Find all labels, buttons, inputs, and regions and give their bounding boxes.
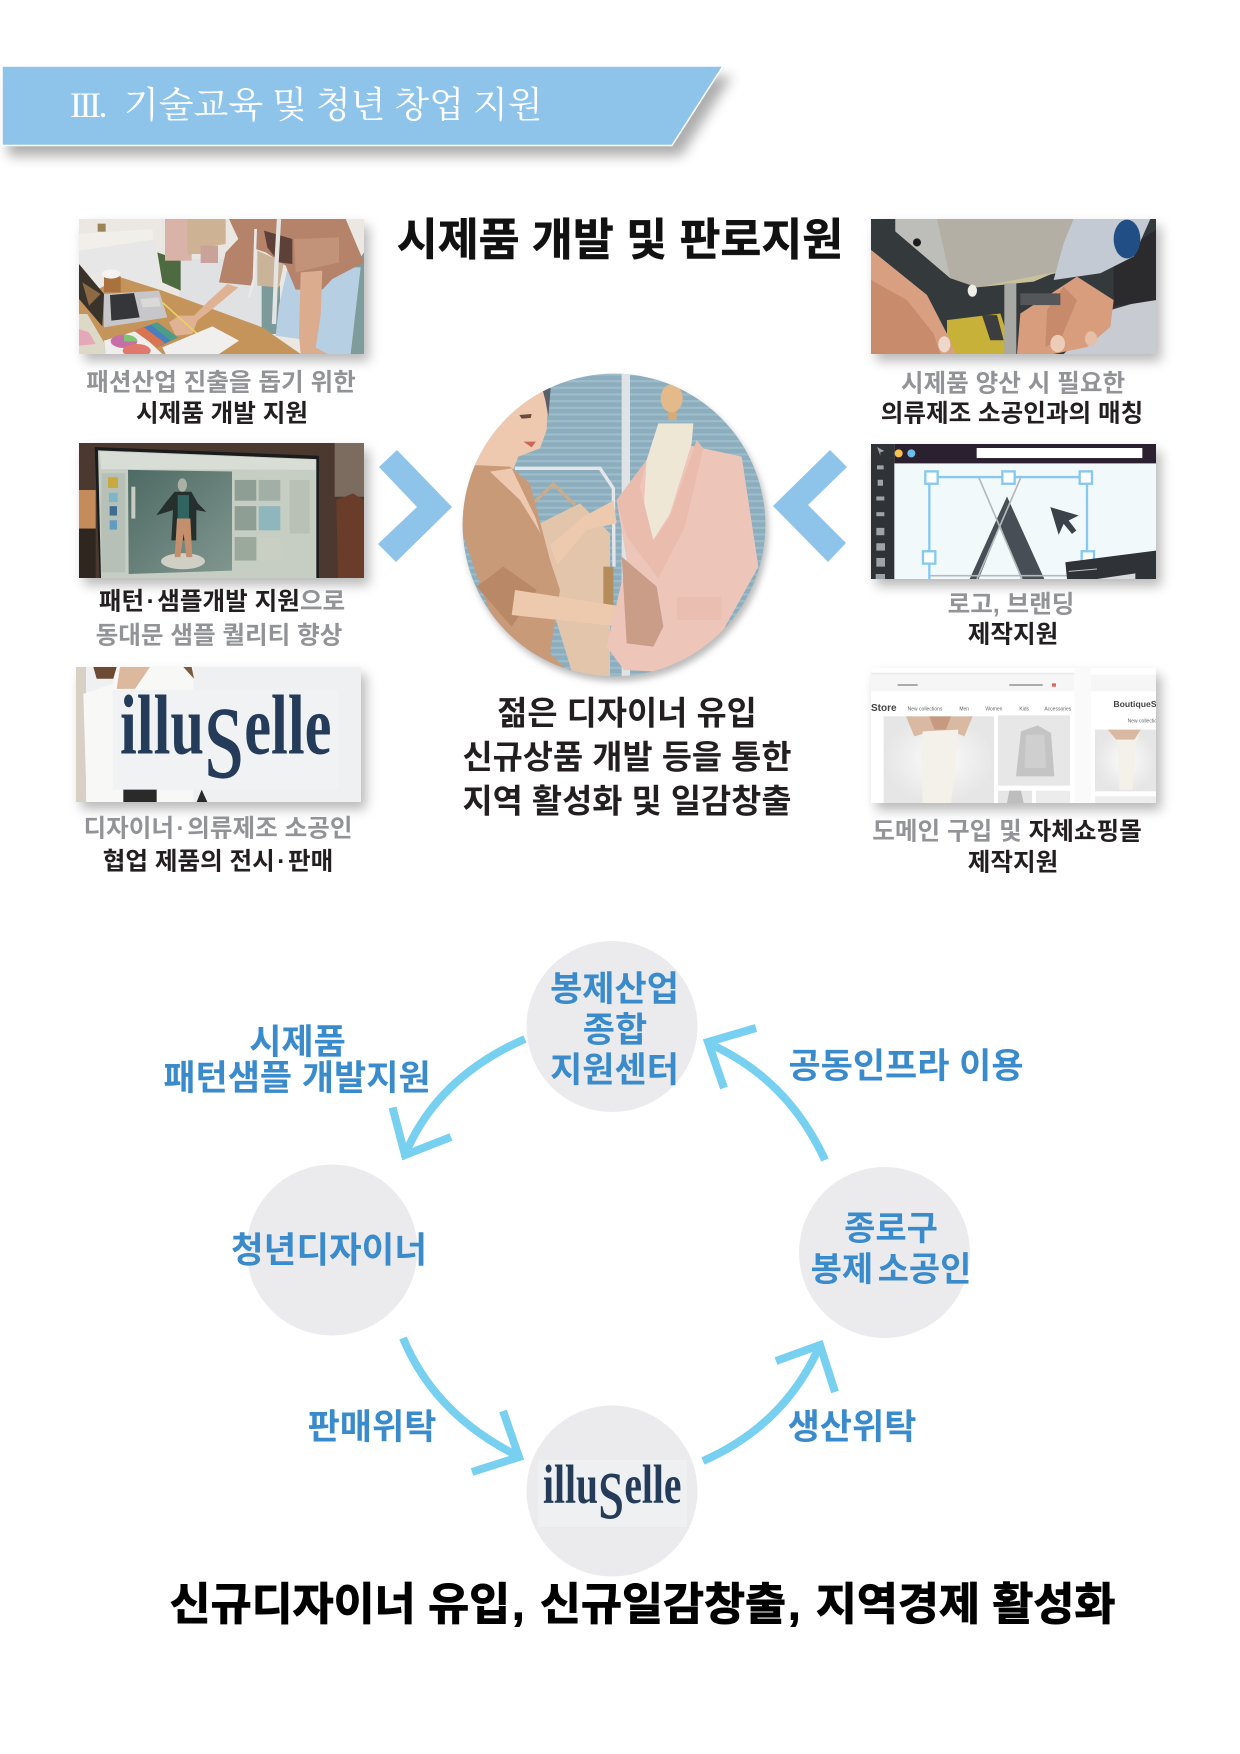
- node: illuselle: illu: [543, 1455, 598, 1516]
- photo: logo design application: [871, 444, 1156, 579]
- section banner: [0, 66, 735, 164]
- node: Jongno artisans: [799, 1167, 971, 1338]
- caption: photo 1: 패션산업 진출을 돕기 위한: [86, 370, 356, 397]
- photo: sewing machine: [871, 219, 1156, 354]
- label: prototype pattern sample: 패턴샘플 개발지원: [163, 1059, 431, 1098]
- photo: online store mockup: [871, 668, 1156, 803]
- node: illuselle: [526, 1406, 698, 1576]
- label: shared infrastructure: 공동인프라 이용: [788, 1047, 1024, 1086]
- arrow: illuselle to artisans: [703, 1345, 835, 1461]
- arrow: centre to designers: [392, 1039, 525, 1155]
- caption: photo 1 bold: 시제품 개발 지원: [136, 401, 308, 428]
- photo: online store mockup: Men: [959, 706, 969, 712]
- photo: 3D pattern software: [79, 443, 364, 578]
- node: Jongno artisans: 봉제 소공인: [811, 1251, 971, 1289]
- line 2: 신규상품 개발 등을 통한: [462, 739, 792, 776]
- node: sewing centre: 종합: [583, 1011, 647, 1050]
- central circular photo: designer fitting jacket: [462, 374, 772, 686]
- node: illuselle: s: [598, 1434, 624, 1539]
- photo: illuselle brand: illu: [120, 678, 204, 772]
- central message text: [462, 695, 792, 820]
- node: young designers: [231, 1164, 427, 1336]
- photo: online store mockup: Store: [871, 703, 897, 714]
- caption: photo 6 bold: 제작지원: [968, 850, 1058, 877]
- section banner: 기술교육 및 청년 창업 지원: [124, 85, 543, 125]
- bottom headline: 신규디자이너 유입, 신규일감창출, 지역경제 활성화: [170, 1580, 1115, 1629]
- section banner: III.: [70, 85, 105, 125]
- node: Jongno artisans: 종로구: [844, 1210, 938, 1248]
- node: sewing centre: 봉제산업: [550, 970, 679, 1009]
- photo: online store mockup: Accessories: [1044, 706, 1072, 712]
- label: prototype pattern sample: [163, 1023, 431, 1098]
- photo: online store mockup: Kids: [1019, 706, 1030, 712]
- cycle diagram: [163, 941, 1024, 1576]
- photo: illuselle brand: elle: [244, 678, 332, 772]
- caption: photo 4 bold: 의류제조 소공인과의 매칭: [881, 401, 1143, 428]
- caption: photo 2 grey: 동대문 샘플 퀄리티 향상: [96, 623, 342, 650]
- caption: photo 3 bold: 협업 제품의 전시·판매: [103, 849, 333, 876]
- photo: online store mockup: New collections: [908, 706, 943, 712]
- arrow: artisans to centre: [708, 1028, 825, 1160]
- node: sewing centre: 지원센터: [550, 1051, 679, 1090]
- node: sewing centre: [526, 941, 698, 1112]
- arrow: right-pointing chevron: [378, 450, 452, 562]
- caption: photo 4: 시제품 양산 시 필요한: [901, 371, 1125, 398]
- node: illuselle: elle: [624, 1455, 682, 1516]
- label: prototype pattern sample: 시제품: [249, 1023, 346, 1062]
- main title: 시제품 개발 및 판로지원: [397, 216, 843, 265]
- photo: designer at desk: [79, 219, 364, 354]
- caption: photo 6: 도메인 구입 및 자체쇼핑몰: [872, 819, 1142, 846]
- label: sales consignment: 판매위탁: [308, 1408, 436, 1447]
- node: young designers: 청년디자이너: [231, 1230, 427, 1270]
- photo: online store mockup: BoutiqueS: [1113, 699, 1156, 709]
- caption: photo 2: 패턴·샘플개발 지원으로: [99, 589, 345, 616]
- line 3: 지역 활성화 및 일감창출: [462, 783, 792, 820]
- label: production consignment: 생산위탁: [788, 1408, 916, 1447]
- photo: online store mockup: Women: [985, 706, 1003, 712]
- line 1: 젊은 디자이너 유입: [497, 695, 757, 732]
- photo: illuselle brand: [76, 667, 361, 802]
- arrow: designers to illuselle: [403, 1338, 519, 1472]
- arrow: left-pointing chevron: [773, 450, 847, 562]
- caption: photo 5 grey: 로고, 브랜딩: [948, 592, 1074, 619]
- caption: photo 3: 디자이너·의류제조 소공인: [84, 816, 352, 843]
- caption: photo 5 bold: 제작지원: [968, 622, 1058, 649]
